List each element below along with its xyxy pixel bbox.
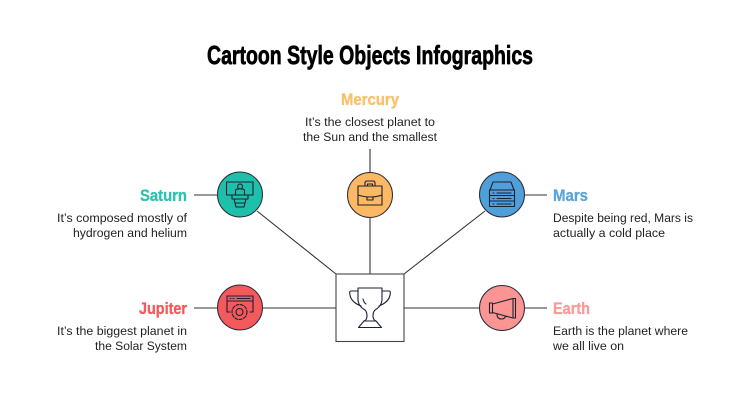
- text block: Mars description: [553, 211, 693, 240]
- text block: Saturn description: hydrogen and helium: [73, 226, 187, 240]
- text block: Earth description: we all live on: [552, 339, 624, 353]
- heading: Saturn: Saturn: [140, 186, 187, 205]
- text block: Mars description: actually a cold place: [553, 226, 665, 240]
- text block: Jupiter description: the Solar System: [95, 339, 187, 353]
- icon: browser with gear: [218, 285, 262, 330]
- icon: trophy: [350, 288, 390, 328]
- text block: Mercury description: the Sun and the smallest: [303, 130, 438, 144]
- heading: Earth: Earth: [553, 299, 590, 318]
- icon: podium: [218, 172, 262, 217]
- connector lines: [194, 149, 547, 308]
- heading: Mars: Mars: [553, 186, 588, 205]
- heading: Jupiter: Jupiter: [139, 299, 187, 318]
- panel: central trophy box: [336, 274, 404, 342]
- text block: Jupiter description: It’s the biggest planet in: [57, 324, 187, 338]
- text block: Saturn description: [57, 211, 188, 240]
- text block: Mercury description: [303, 115, 438, 144]
- panel: Saturn: [57, 172, 262, 240]
- icon: briefcase: [348, 172, 392, 218]
- icon: server stack: [480, 172, 524, 217]
- text block: Saturn description: It’s composed mostly of: [57, 211, 188, 225]
- icon: megaphone: [480, 286, 524, 330]
- title: Cartoon Style Objects Infographics: [207, 40, 533, 70]
- panel: Jupiter: [57, 285, 262, 353]
- panel: Earth: [480, 286, 688, 353]
- text block: Earth description: Earth is the planet where: [553, 324, 688, 338]
- text block: Mars description: Despite being red, Mars is: [553, 211, 693, 225]
- text block: Earth description: [552, 324, 688, 353]
- heading: Mercury: Mercury: [341, 90, 399, 109]
- text block: Mercury description: It’s the closest planet to: [305, 115, 435, 129]
- panel: Mars: [480, 172, 693, 240]
- panel: Mercury: [303, 90, 438, 218]
- text block: Jupiter description: [57, 324, 187, 353]
